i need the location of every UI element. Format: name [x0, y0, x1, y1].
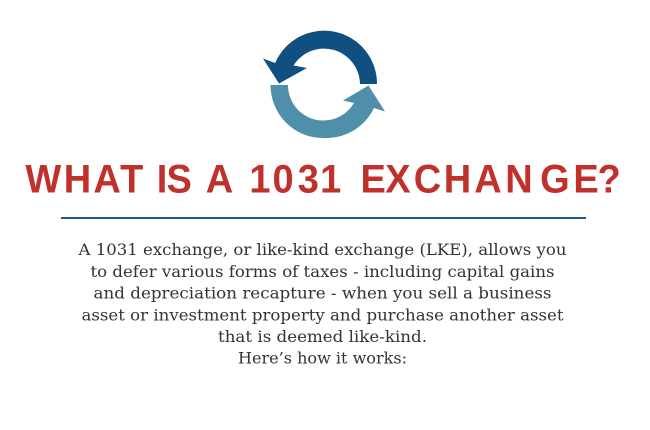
title: A — [206, 158, 233, 202]
light blue arrow — [270, 85, 385, 138]
title: EXCHANGE? — [361, 158, 621, 202]
icon: circular exchange arrows — [263, 31, 385, 138]
description text: asset or investment property and purchase another asset — [82, 306, 564, 324]
title: IS — [157, 158, 192, 202]
description text: to defer various forms of taxes - including capital gains — [90, 263, 555, 281]
description text: that is deemed like-kind. — [218, 328, 427, 346]
description text: and depreciation recapture - when you sell a business — [94, 284, 552, 302]
title: 1031 — [249, 158, 341, 202]
dark blue arrow — [263, 31, 377, 84]
divider rule — [61, 217, 586, 219]
description text — [77, 241, 567, 368]
description text: Here’s how it works: — [238, 350, 407, 368]
title: WHAT — [25, 158, 143, 202]
description text: A 1031 exchange, or like-kind exchange (LKE), allows you — [77, 241, 567, 259]
